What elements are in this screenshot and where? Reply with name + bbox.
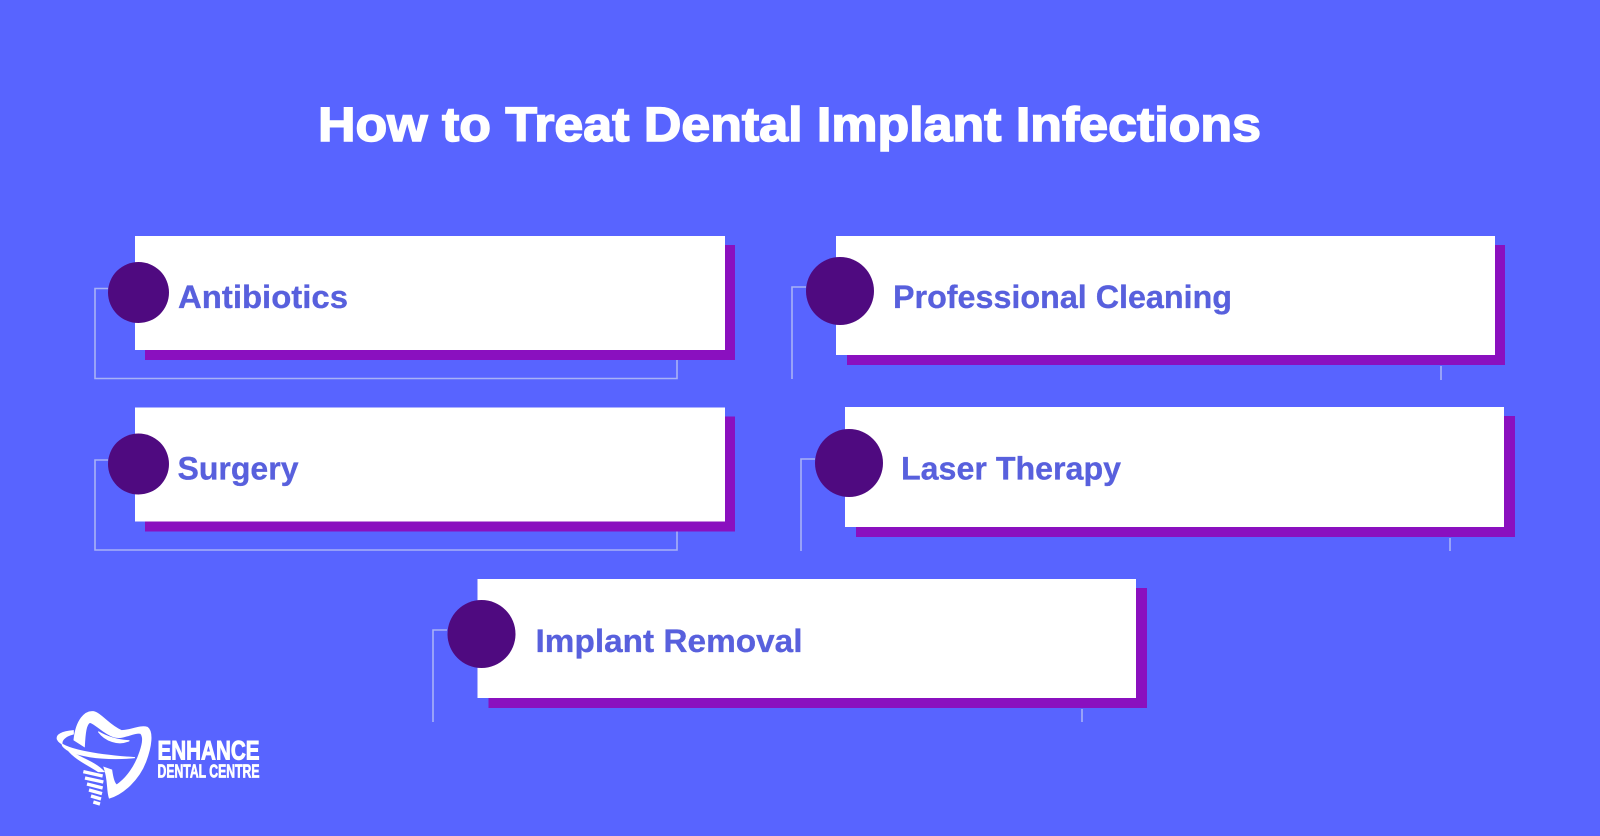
panel: laser therapy [801,407,1515,551]
icon: tooth with implant [57,712,151,804]
title: How to Treat Dental Implant Infections [318,99,1261,152]
logo wordmark: ENHANCE [158,736,260,766]
logo wordmark: DENTAL CENTRE [158,762,260,782]
panel: antibiotics: Antibiotics [178,279,348,315]
logo wordmark [158,736,260,782]
panel: implant removal [433,579,1147,722]
panel: professional cleaning [792,236,1505,380]
panel: surgery: Surgery [178,450,299,486]
logo: enhance dental centre [57,712,260,804]
panel: implant removal: Implant Removal [536,623,802,659]
panel: antibiotics [95,236,735,378]
panel: surgery [95,408,735,550]
panel: laser therapy: Laser Therapy [901,450,1121,486]
panel: professional cleaning: Professional Cleaning [893,279,1232,315]
